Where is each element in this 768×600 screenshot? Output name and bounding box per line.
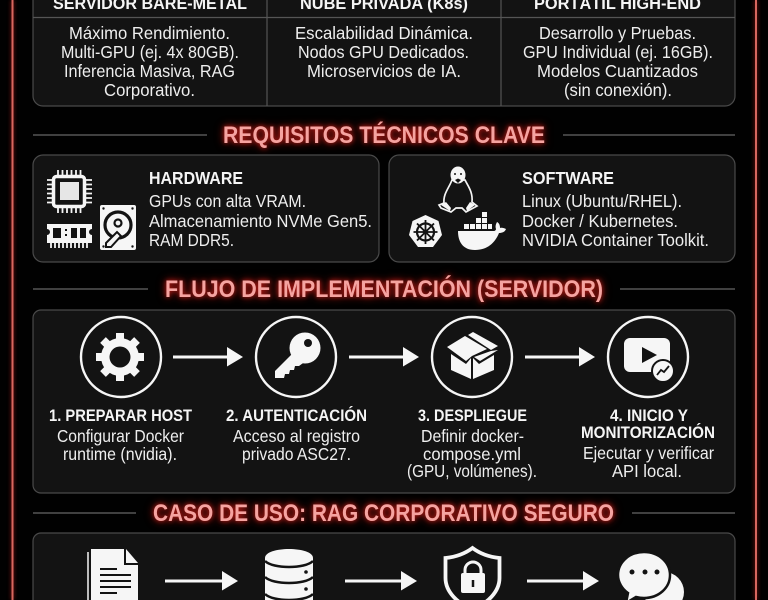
step 4: inicio y monitorización: MONITORIZACIÓN: [581, 423, 715, 442]
column: servidor bare-metal: Corporativo.: [104, 80, 195, 100]
icon: linux penguin: [439, 166, 477, 212]
panel: hardware: RAM DDR5.: [149, 230, 234, 250]
icon: gear: [96, 333, 144, 381]
column: servidor bare-metal: [53, 0, 247, 100]
column: portátil high-end: GPU Individual (ej. 16GB).: [523, 42, 713, 62]
heading: caso de uso: CASO DE USO: RAG CORPORATIVO SEGURO: [153, 500, 614, 527]
panel: software: SOFTWARE: [522, 168, 614, 188]
step 4: inicio y monitorización: Ejecutar y verificar: [583, 443, 714, 463]
icon: database: [265, 549, 313, 600]
column: nube privada: Microservicios de IA.: [307, 61, 461, 81]
step 1: preparar host: [49, 317, 192, 464]
step 4: inicio y monitorización: 4. INICIO Y: [610, 407, 688, 425]
column: servidor bare-metal: Inferencia Masiva, RAG: [64, 61, 235, 81]
panel: software: Docker / Kubernetes.: [522, 211, 678, 231]
step 1: preparar host: runtime (nvidia).: [63, 444, 177, 464]
icon: shield with lock: [446, 548, 500, 600]
column: portátil high-end: (sin conexión).: [564, 80, 672, 100]
icon: docker whale: [458, 212, 506, 250]
arrow: step 3 to 4: [525, 347, 595, 366]
step 3: despliegue: 3. DESPLIEGUE: [418, 407, 527, 425]
panel: hardware: GPUs con alta VRAM.: [149, 191, 306, 211]
arrow: shield to chat: [527, 571, 599, 590]
column: nube privada: Nodos GPU Dedicados.: [298, 42, 469, 62]
column: portátil high-end: [523, 0, 713, 100]
icon: box: [447, 332, 498, 379]
panel: software: [389, 155, 735, 262]
panel: software: Linux (Ubuntu/RHEL).: [522, 191, 682, 211]
panel: hardware: Almacenamiento NVMe Gen5.: [149, 211, 372, 231]
column: servidor bare-metal: Multi-GPU (ej. 4x 80GB).: [61, 42, 239, 62]
step 3: despliegue: compose.yml: [423, 444, 521, 464]
heading: flujo de implementación: FLUJO DE IMPLEMENTACIÓN (SERVIDOR): [165, 275, 603, 303]
icon: play with chart badge: [624, 338, 674, 382]
panel: hardware: HARDWARE: [149, 168, 243, 188]
column: servidor bare-metal: Máximo Rendimiento.: [69, 23, 230, 43]
column: portátil high-end: Modelos Cuantizados: [537, 61, 698, 81]
column: portátil high-end: Desarrollo y Pruebas.: [539, 23, 696, 43]
icon: ram module: [47, 224, 92, 248]
arrow: step 1 to 2: [173, 347, 243, 366]
heading: requisitos técnicos clave: REQUISITOS TÉCNICOS CLAVE: [223, 121, 545, 149]
icon: chat bubbles: [618, 552, 684, 600]
panel: deployment options table: [33, 0, 735, 106]
step 4: inicio y monitorización: API local.: [612, 461, 682, 481]
step 2: autenticación: Acceso al registro: [233, 426, 360, 446]
step 1: preparar host: Configurar Docker: [57, 426, 184, 446]
icon: cpu chip: [47, 170, 92, 213]
column: nube privada: [295, 0, 473, 81]
arrow: database to shield: [345, 571, 417, 590]
step 3: despliegue: (GPU, volúmenes).: [407, 461, 537, 481]
step 3: despliegue: [407, 317, 537, 481]
arrow: document to database: [165, 571, 238, 590]
panel: software: NVIDIA Container Toolkit.: [522, 230, 709, 250]
panel: hardware: [33, 155, 379, 262]
panel: rag use case: [33, 533, 735, 600]
icon: kubernetes: [409, 215, 442, 247]
icon: key: [275, 332, 320, 378]
column: nube privada: Escalabilidad Dinámica.: [295, 23, 473, 43]
step 2: autenticación: 2. AUTENTICACIÓN: [226, 406, 367, 425]
step 1: preparar host: 1. PREPARAR HOST: [49, 407, 192, 425]
arrow: step 2 to 3: [349, 347, 419, 366]
step 2: autenticación: privado ASC27.: [242, 444, 351, 464]
icon: document: [88, 549, 138, 600]
step 3: despliegue: Definir docker-: [421, 426, 524, 446]
panel: implementation flow: [33, 310, 735, 493]
icon: hard drive: [100, 205, 136, 250]
step 4: inicio y monitorización: [581, 317, 715, 481]
step 2: autenticación: [226, 317, 367, 464]
